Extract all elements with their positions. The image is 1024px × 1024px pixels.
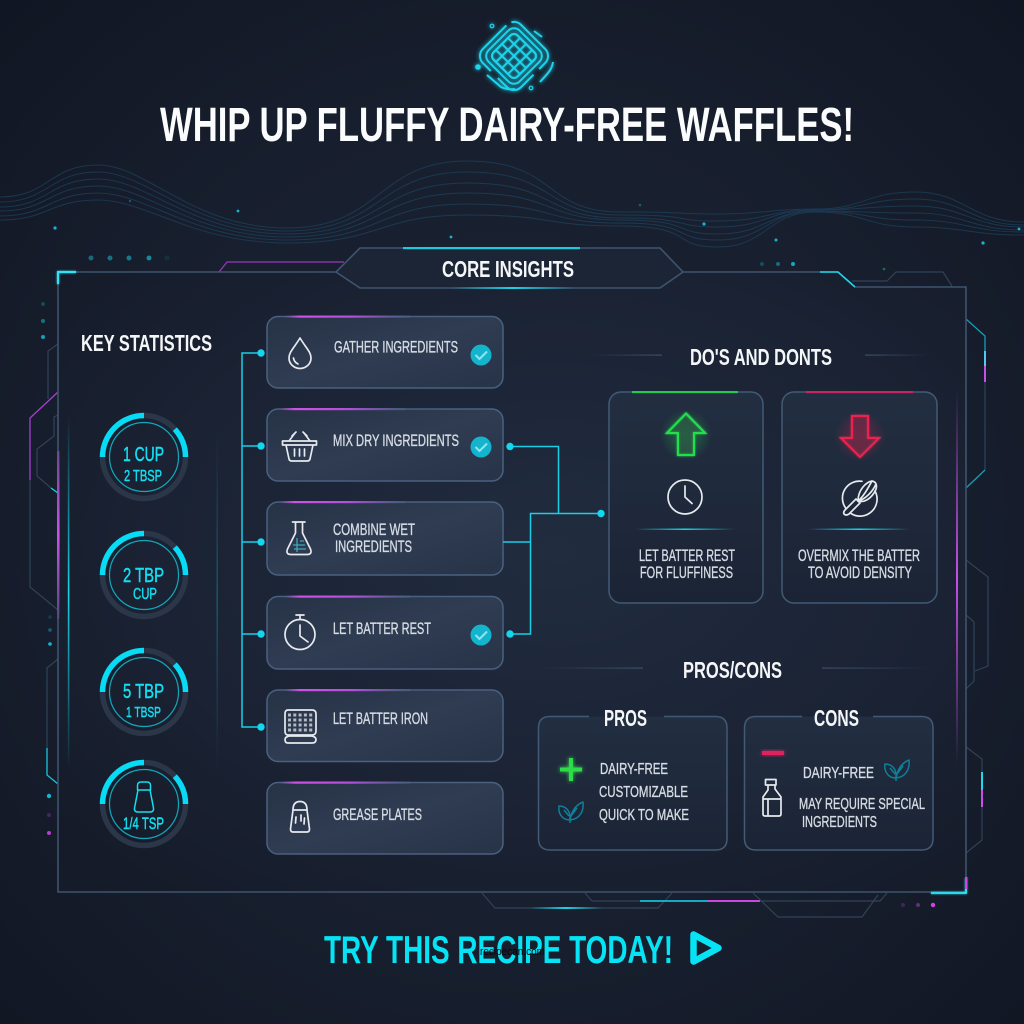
- step card: grease plates: [267, 782, 503, 854]
- connectors: steps tree: [242, 349, 265, 731]
- icon: water drop: [289, 338, 311, 368]
- step card: gather ingredients: [267, 316, 503, 388]
- stat ring: 1/4 tsp with salt shaker: 1/4 TSP: [123, 814, 164, 833]
- panel: dont card: [782, 391, 937, 603]
- stat ring: 2 tbp cup: CUP: [133, 586, 157, 603]
- panel: do card: FOR FLUFFINESS: [640, 564, 733, 582]
- panel: cons: MAY REQUIRE SPECIAL: [799, 796, 925, 813]
- icon: play arrow: [694, 934, 718, 962]
- panel: pros: DAIRY-FREE: [600, 761, 668, 778]
- panel: do card: LET BATTER REST: [639, 547, 735, 565]
- stat ring: 5 tbp 1 tbsp: [102, 650, 186, 734]
- icon: spray bottle: [763, 780, 781, 816]
- call to action: TRY THIS RECIPE TODAY!: [324, 929, 673, 972]
- step card: let batter rest: LET BATTER REST: [333, 620, 431, 638]
- stat ring: 2 tbp cup: 2 TBP: [123, 565, 164, 587]
- icon: leaf: [559, 802, 583, 823]
- step card: mix dry ingredients: [267, 408, 503, 481]
- step card: combine wet ingredients: INGREDIENTS: [335, 538, 412, 556]
- waffle logo icon: [475, 18, 553, 94]
- step card: gather ingredients: GATHER INGREDIENTS: [334, 339, 458, 357]
- panel: pros: CUSTOMIZABLE: [599, 784, 688, 801]
- stat ring: 2 tbp cup: [102, 534, 186, 616]
- heading: core insights: [336, 247, 683, 289]
- panel: pros: QUICK TO MAKE: [599, 807, 689, 824]
- icon: leaf: [885, 760, 909, 781]
- wave decoration: [0, 161, 1024, 247]
- panel: cons: DAIRY-FREE: [803, 765, 874, 782]
- panel: do card: [609, 391, 763, 603]
- watermark: recipecan.com: [480, 946, 545, 958]
- icon: red minus: [762, 751, 784, 755]
- stat ring: 1/4 tsp with salt shaker: [102, 762, 186, 846]
- side and bottom circuit decorations: [30, 262, 988, 917]
- heading: core insights: CORE INSIGHTS: [442, 256, 574, 282]
- panel: cons: INGREDIENTS: [802, 814, 877, 831]
- panel: dont card: TO AVOID DENSITY: [808, 564, 912, 582]
- icon: green up arrow: [667, 414, 705, 455]
- icon: basket: [282, 432, 316, 461]
- step card: mix dry ingredients: MIX DRY INGREDIENTS: [333, 432, 459, 450]
- stat ring: 1 cup 2 tbsp: 1 CUP: [123, 444, 164, 466]
- stat ring: 5 tbp 1 tbsp: 1 TBSP: [126, 704, 161, 721]
- connectors: to dos and donts: [503, 443, 605, 638]
- icon: red down arrow: [841, 416, 879, 457]
- step card: combine wet ingredients: COMBINE WET: [333, 521, 415, 539]
- stat ring: 5 tbp 1 tbsp: 5 TBP: [123, 681, 164, 703]
- step card: let batter iron: [267, 689, 503, 762]
- step card: let batter rest: [267, 596, 503, 669]
- icon: flask: [287, 522, 311, 554]
- panel: dont card: OVERMIX THE BATTER: [798, 547, 920, 565]
- panel: cons: CONS: [814, 705, 859, 731]
- icon: waffle iron: [285, 710, 316, 743]
- heading: dos and donts: DO'S AND DONTS: [690, 344, 832, 370]
- step card: combine wet ingredients: [267, 501, 503, 575]
- panel: pros: PROS: [604, 705, 647, 731]
- icon: clock: [668, 480, 702, 514]
- main panel frame: [57, 272, 967, 893]
- icon: whisk: [842, 481, 877, 516]
- heading: pros cons: PROS/CONS: [683, 657, 782, 683]
- step card: grease plates: GREASE PLATES: [333, 806, 422, 824]
- panel: cons: [744, 705, 933, 850]
- stat ring: 1 cup 2 tbsp: 2 TBSP: [124, 468, 162, 485]
- icon: green plus: [560, 758, 582, 781]
- heading: key statistics: KEY STATISTICS: [81, 330, 212, 356]
- icon: stopwatch: [285, 615, 315, 650]
- step card: let batter iron: LET BATTER IRON: [333, 710, 428, 728]
- floating particles: [41, 200, 1020, 907]
- stat ring: 1 cup 2 tbsp: [102, 416, 186, 498]
- panel: pros: [538, 705, 727, 850]
- icon: salt shaker: [290, 802, 310, 832]
